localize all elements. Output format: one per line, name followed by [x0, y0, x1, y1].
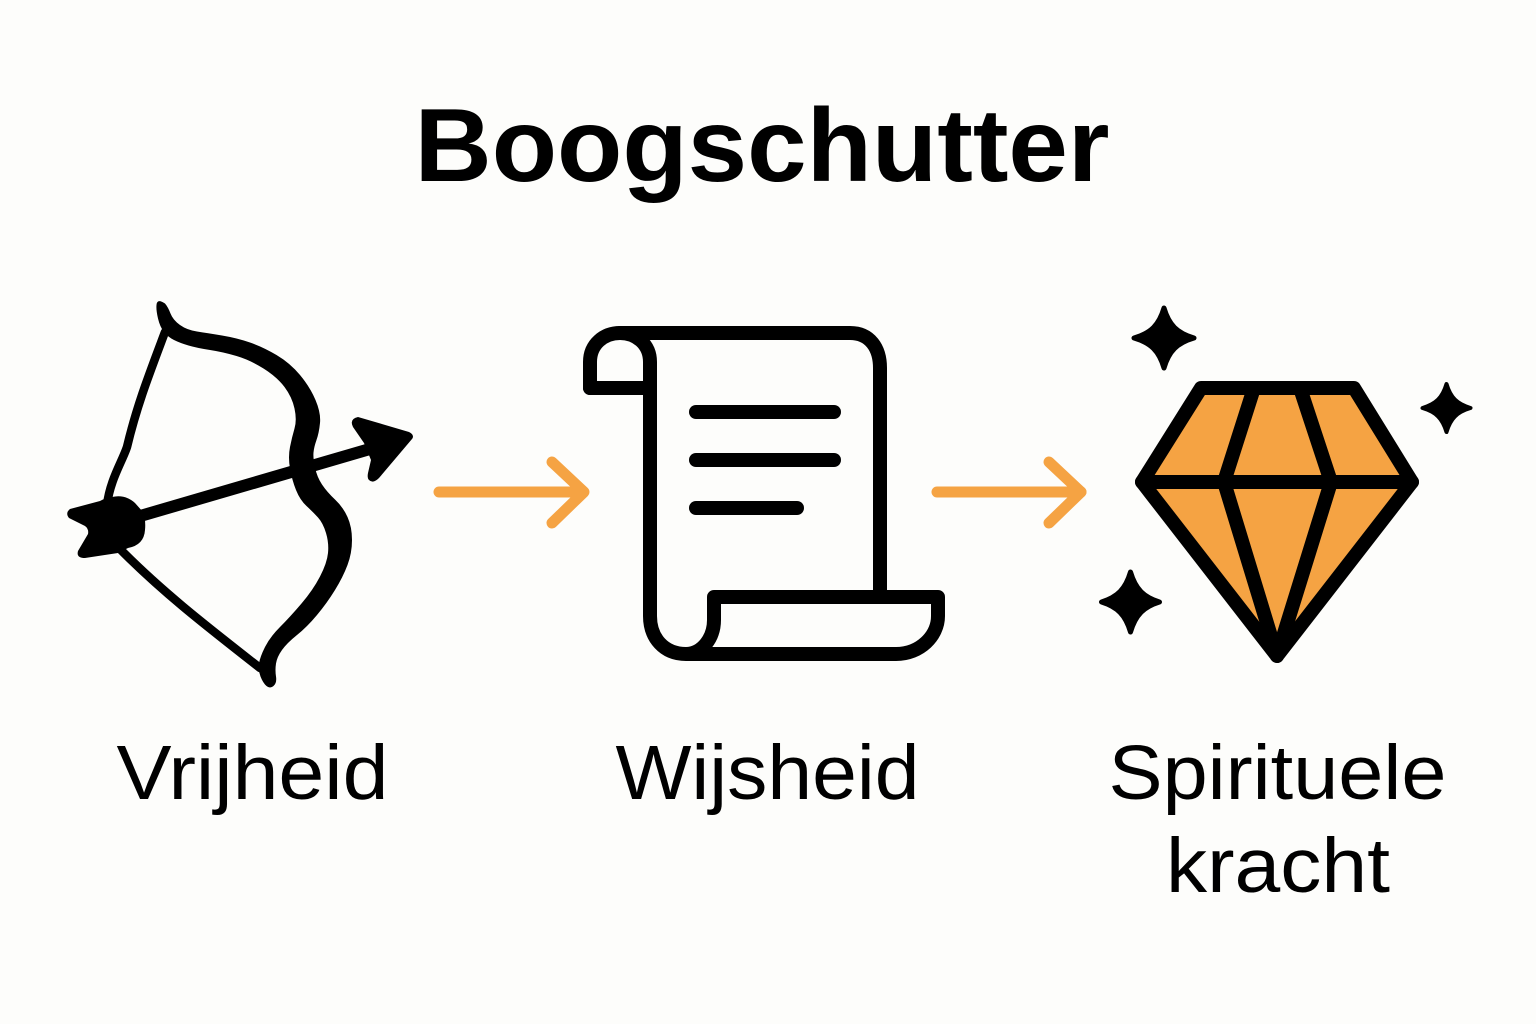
icon: bow and arrow — [67, 301, 413, 688]
arrow: scroll to diamond — [937, 462, 1081, 523]
bow string — [107, 332, 260, 668]
arrowhead — [352, 417, 413, 482]
title: Boogschutter — [414, 88, 1110, 204]
sparkle top left — [1134, 308, 1194, 368]
icon: scroll — [590, 333, 938, 654]
sparkle right — [1422, 384, 1470, 432]
arrow shaft — [130, 448, 375, 519]
label: Spirituele kracht — [1108, 730, 1446, 909]
bow limb — [156, 301, 352, 688]
fletching and grip — [67, 496, 145, 558]
icon: diamond with sparkles — [1102, 308, 1470, 656]
sparkle bottom left — [1102, 572, 1160, 632]
label: Wijsheid: Wijsheid — [616, 730, 920, 816]
label: Spirituele kracht: Spirituele — [1108, 730, 1446, 816]
label: Spirituele kracht: kracht — [1166, 823, 1390, 909]
label: Vrijheid: Vrijheid — [116, 730, 388, 816]
arrow: bow to scroll — [439, 462, 584, 523]
